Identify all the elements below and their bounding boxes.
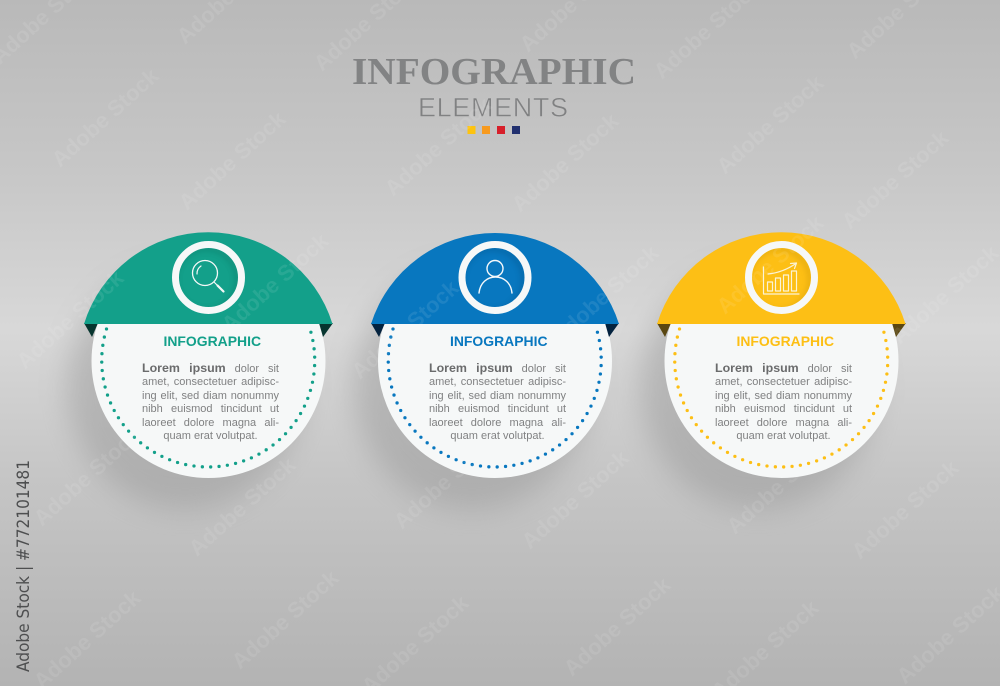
panel: teal — [67, 232, 333, 510]
body text: laoreet dolore magna ali- — [429, 417, 566, 429]
heading: INFOGRAPHIC: INFOGRAPHIC — [352, 51, 636, 93]
watermarks: Adobe Stock — [227, 565, 344, 674]
ring — [462, 244, 528, 311]
body text: ing elit, sed diam nonummy — [142, 390, 279, 402]
watermarks: Adobe Stock — [12, 265, 129, 374]
right ribbon fold — [605, 323, 619, 337]
icon: growth chart — [764, 263, 799, 294]
heading: INFOGRAPHIC — [736, 333, 834, 349]
watermarks: Adobe Stock — [29, 422, 146, 531]
watermarks: Adobe Stock — [174, 106, 291, 215]
ring — [175, 244, 242, 311]
white circle — [664, 244, 898, 478]
body text: ing elit, sed diam nonummy — [429, 390, 566, 402]
heading: INFOGRAPHIC — [164, 333, 261, 349]
body text — [715, 363, 853, 447]
colour squares — [468, 126, 520, 134]
dotted ring — [675, 326, 888, 467]
body text: laoreet dolore magna ali- — [142, 417, 279, 429]
body text: quam erat volutpat. — [450, 430, 545, 442]
body text: nibh euismod tincidunt ut — [715, 403, 852, 415]
watermarks: Adobe Stock — [389, 425, 506, 534]
watermarks: Adobe Stock — [712, 210, 829, 319]
cap — [657, 232, 906, 324]
body text — [142, 363, 280, 447]
watermarks: Adobe Stock — [184, 452, 301, 561]
left ribbon fold — [84, 323, 98, 337]
dotted ring — [102, 326, 315, 467]
watermarks: Adobe Stock — [380, 92, 497, 201]
body text: amet, consectetuer adipisc- — [715, 376, 852, 388]
body text: quam erat volutpat. — [736, 430, 831, 442]
heading: INFOGRAPHIC — [450, 333, 548, 349]
watermarks: Adobe Stock — [47, 63, 164, 172]
shadow — [640, 266, 876, 510]
watermarks: Adobe Stock — [837, 125, 954, 234]
panel: yellow — [640, 232, 906, 510]
body text: nibh euismod tincidunt ut — [142, 403, 279, 415]
watermarks: Adobe Stock — [507, 108, 624, 217]
ring — [748, 244, 814, 311]
body text: quam erat volutpat. — [163, 430, 258, 442]
body text: nibh euismod tincidunt ut — [429, 403, 566, 415]
subheading: ELEMENTS: ELEMENTS — [418, 92, 568, 122]
white circle — [92, 244, 326, 478]
watermarks: Adobe Stock — [887, 240, 1000, 349]
icon: magnifier — [192, 260, 224, 292]
right ribbon fold — [319, 323, 333, 337]
left ribbon fold — [657, 323, 671, 337]
cap — [84, 232, 332, 324]
body text — [429, 363, 567, 447]
watermarks: Adobe Stock — [847, 455, 964, 564]
title: infographic elements — [352, 51, 636, 134]
watermarks: Adobe Stock — [712, 70, 829, 179]
dotted ring — [388, 326, 601, 467]
shadow — [354, 266, 590, 510]
white circle — [378, 244, 612, 478]
panel: blue — [354, 233, 619, 510]
shadow — [67, 266, 303, 510]
body text: amet, consectetuer adipisc- — [142, 376, 279, 388]
body text: laoreet dolore magna ali- — [715, 417, 852, 429]
cap — [371, 233, 619, 324]
watermarks: Adobe Stock — [347, 275, 464, 384]
body text: ing elit, sed diam nonummy — [715, 390, 852, 402]
watermarks: Adobe Stock — [217, 228, 334, 337]
right ribbon fold — [892, 323, 906, 337]
watermarks: Adobe Stock — [547, 240, 664, 349]
watermarks: Adobe Stock — [722, 430, 839, 539]
watermarks: Adobe Stock — [559, 572, 676, 681]
icon: person — [479, 260, 512, 293]
left ribbon fold — [371, 323, 385, 337]
body text: amet, consectetuer adipisc- — [429, 376, 566, 388]
watermarks: Adobe Stock — [517, 445, 634, 554]
stock id label: Adobe Stock | #772101481 — [14, 460, 34, 672]
